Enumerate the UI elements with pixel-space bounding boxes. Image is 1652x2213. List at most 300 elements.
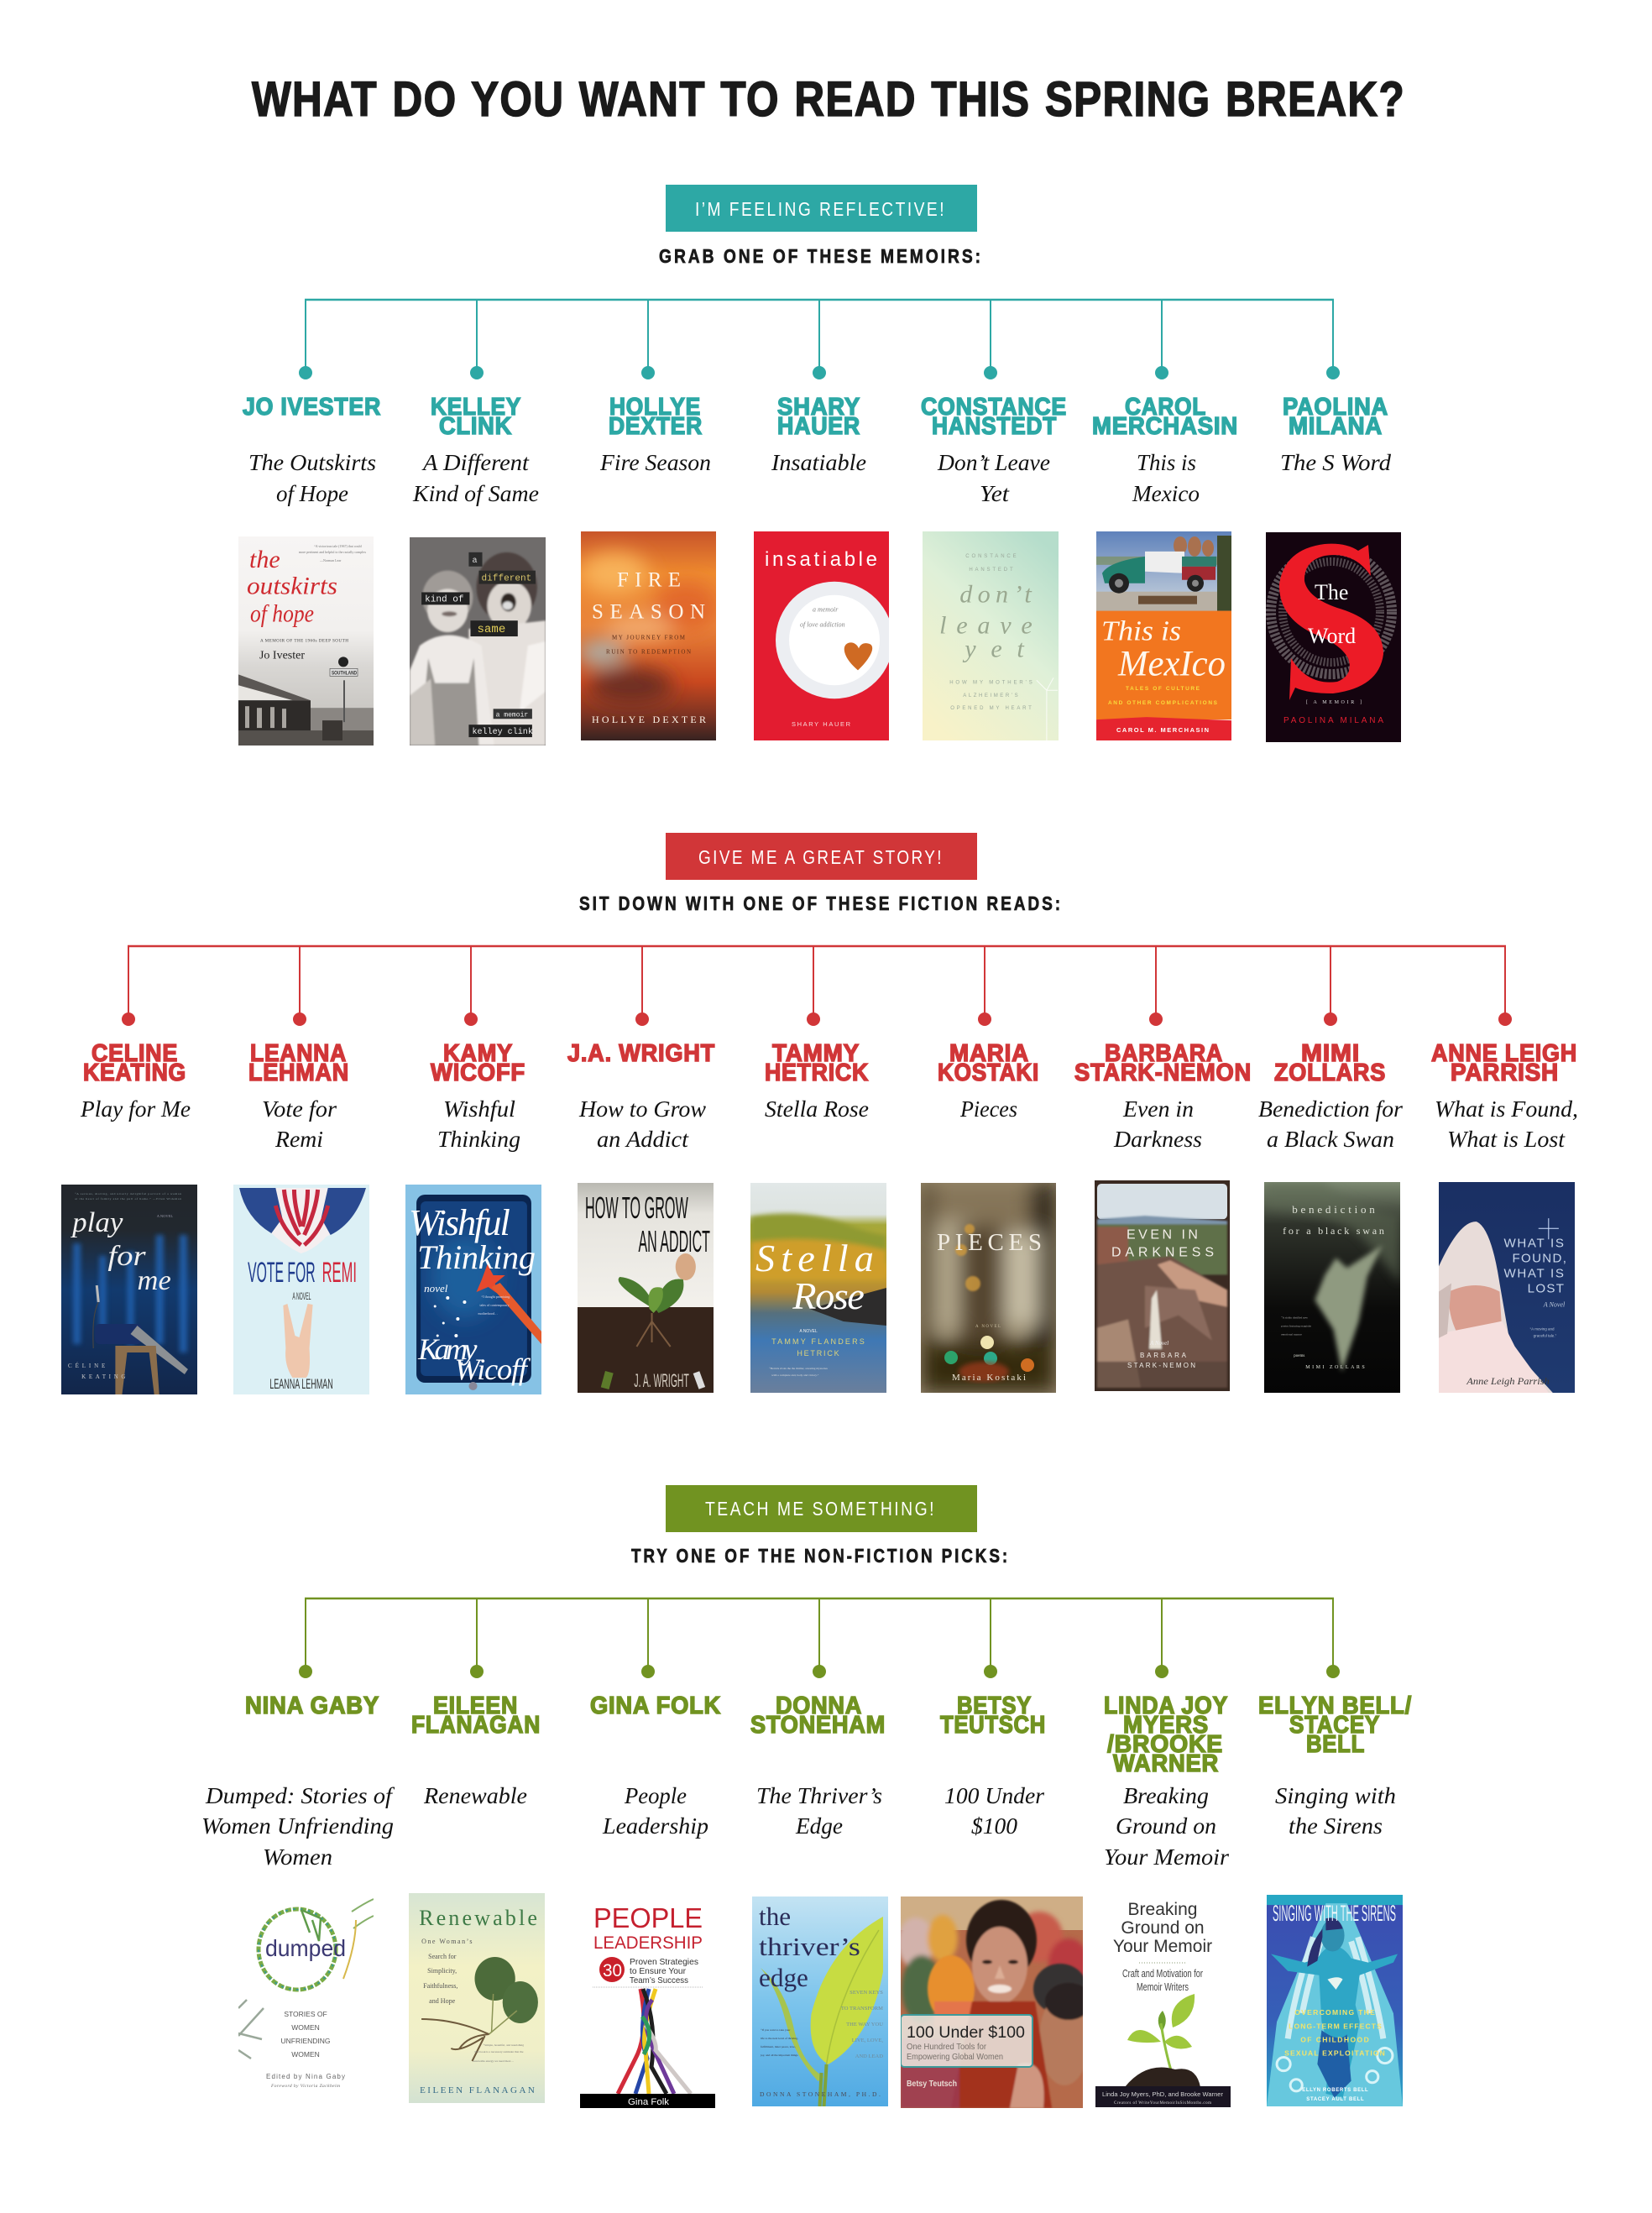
subheading: fiction: SIT DOWN WITH ONE OF THESE FICTION READS: <box>579 892 1063 914</box>
author: Linda Joy Myers / Brooke Warner: LINDA JOY <box>1104 1692 1228 1719</box>
author: Carol Merchasin <box>1092 394 1238 440</box>
book cover: The S Word: [ A MEMOIR ] <box>1306 700 1362 705</box>
book cover: What is Found, What is Lost: WHAT IS <box>1503 1236 1564 1250</box>
book cover: Wishful Thinking: Kamy <box>417 1332 478 1366</box>
book title: Singing with the Sirens: Singing with <box>1275 1782 1396 1808</box>
book title: Vote for Remi: Vote for <box>262 1096 337 1122</box>
book cover: A Different Kind of Same: kelley clink <box>472 727 533 736</box>
book title: 100 Under $100 <box>944 1782 1044 1839</box>
book title: Stella Rose: Stella Rose <box>765 1096 869 1122</box>
author: Maria Kostaki: KOSTAKI <box>938 1059 1039 1086</box>
book cover: Wishful Thinking: Wicoff <box>454 1352 531 1386</box>
book cover: People Leadership: Gina Folk <box>628 2097 670 2107</box>
book cover: Dumped: UNFRIENDING <box>280 2037 331 2045</box>
author: Betsy Teutsch: BETSY <box>957 1692 1032 1719</box>
tree connector: non-fiction <box>299 1598 1340 1678</box>
book cover: Breaking Ground on Your Memoir: Ground on <box>1121 1918 1205 1938</box>
author: Eileen Flanagan: EILEEN <box>433 1692 518 1719</box>
book cover: Don't Leave Yet: HANSTEDT <box>969 568 1013 573</box>
book cover: Don't Leave Yet: ALZHEIMER’S <box>963 693 1018 698</box>
book cover: What is Found, What is Lost: graceful tale.” <box>1534 1334 1557 1338</box>
book cover: Even in Darkness: STARK-NEMON <box>1127 1362 1195 1369</box>
book cover: Fire Season: RUIN TO REDEMPTION <box>606 648 691 655</box>
author: Linda Joy Myers / Brooke Warner: /BROOKE <box>1107 1731 1223 1758</box>
author: Eileen Flanagan: FLANAGAN <box>411 1712 541 1739</box>
book cover: Stella Rose: HETRICK <box>797 1349 839 1358</box>
book cover: The Outskirts of Hope: the <box>249 546 280 573</box>
author: Linda Joy Myers / Brooke Warner <box>1104 1692 1228 1777</box>
book cover: Renewable: Search for <box>428 1953 457 1960</box>
author: Maria Kostaki: MARIA <box>949 1040 1029 1067</box>
book cover: This is Mexico: TALES OF CULTURE <box>1126 686 1200 692</box>
book title: Singing with the Sirens: the Sirens <box>1289 1813 1383 1839</box>
book title: Don't Leave Yet: Yet <box>980 480 1010 506</box>
book title: How to Grow an Addict <box>578 1096 707 1152</box>
book cover: Play for Me: at the heart of family and the pull of home.” —Ellen Wideman <box>75 1197 181 1201</box>
book cover: Insatiable: insatiable <box>765 548 877 571</box>
author: Mimi Zollars <box>1274 1040 1386 1086</box>
author: Donna Stoneham: STONEHAM <box>750 1712 886 1739</box>
book title: The Thriver's Edge: Edge <box>795 1813 843 1839</box>
book cover: The Thriver's Edge: DONNA STONEHAM, PH.D. <box>760 2090 881 2098</box>
author: Kamy Wicoff: KAMY <box>443 1040 513 1067</box>
book cover: Pieces: Maria Kostaki <box>952 1373 1026 1383</box>
book cover: Dumped: STORIES OF <box>284 2010 327 2018</box>
book title: The Outskirts of Hope: of Hope <box>276 480 348 506</box>
book cover: Renewable <box>409 1893 545 2103</box>
book title: Don't Leave Yet <box>937 449 1050 506</box>
book title: What is Found, What is Lost: What is Found, <box>1435 1096 1578 1122</box>
book cover: Breaking Ground on Your Memoir: Creators of WriteYourMemoirInSixMonths.com <box>1114 2101 1211 2106</box>
author: Anne Leigh Parrish <box>1431 1040 1577 1086</box>
author: Tammy Hetrick: TAMMY <box>772 1040 860 1067</box>
book cover: Stella Rose: A NOVEL <box>799 1329 818 1334</box>
book cover: Benediction for a Black Swan: “A richly distilled new <box>1281 1316 1308 1320</box>
author: Leanna Lehman <box>248 1040 349 1086</box>
book cover: The Outskirts of Hope: SOUTHLAND <box>332 671 358 676</box>
author: Paolina Milana: MILANA <box>1289 413 1383 440</box>
book cover: A Different Kind of Same: a <box>472 556 478 565</box>
book cover: Even in Darkness: DARKNESS <box>1111 1244 1214 1259</box>
author: Constance Hanstedt: HANSTEDT <box>932 413 1057 440</box>
author: Leanna Lehman: LEHMAN <box>248 1059 349 1086</box>
book cover: The Thriver's Edge: fulfillment, inner peace, love, <box>761 2045 796 2049</box>
book cover: Don't Leave Yet: don’t <box>959 581 1032 609</box>
book title: How to Grow an Addict: an Addict <box>597 1126 689 1152</box>
book cover: Singing with the Sirens: STACEY AULT BELL <box>1306 2097 1364 2102</box>
section: fiction <box>61 833 1578 1394</box>
book cover: Dumped: WOMEN <box>291 2050 320 2059</box>
author: Barbara Stark-Nemon: STARK-NEMON <box>1074 1059 1252 1086</box>
author: Ellyn Bell / Stacey Bell: STACEY <box>1289 1712 1380 1739</box>
book cover: Benediction for a Black Swan <box>1264 1182 1400 1393</box>
book title: People Leadership: People <box>624 1782 687 1808</box>
book title: Renewable: Renewable <box>423 1782 527 1808</box>
book title: A Different Kind of Same <box>412 449 539 506</box>
author: Eileen Flanagan <box>411 1692 541 1739</box>
author: Tammy Hetrick <box>765 1040 869 1086</box>
book title: Pieces: Pieces <box>959 1096 1017 1122</box>
book title: What is Found, What is Lost <box>1435 1096 1578 1152</box>
book cover: Breaking Ground on Your Memoir <box>1095 1900 1231 2107</box>
book cover: The Thriver's Edge: thriver’s <box>759 1932 860 1961</box>
author: Constance Hanstedt <box>921 394 1067 440</box>
book cover: This is Mexico: This is <box>1101 616 1181 646</box>
author: J.A. Wright: J.A. WRIGHT <box>567 1040 715 1067</box>
book cover: People Leadership: LEADERSHIP <box>593 1933 703 1953</box>
banner: great story <box>666 833 977 880</box>
book cover: This is Mexico <box>1096 531 1231 740</box>
book cover: Dumped <box>238 1898 374 2089</box>
book cover: Fire Season <box>581 531 716 740</box>
author: Kelley Clink: CLINK <box>439 413 512 440</box>
title: WHAT DO YOU WANT TO READ THIS SPRING BREAK? <box>252 72 1405 127</box>
book cover: Singing with the Sirens: LONG-TERM EFFECTS <box>1289 2022 1382 2030</box>
book cover: Breaking Ground on Your Memoir: Your Memoir <box>1113 1937 1212 1956</box>
book cover: The Thriver's Edge: LIVE, LOVE, <box>852 2038 883 2043</box>
book cover: Stella Rose: “Hetrick rivals the the thriller, arresting mysteries <box>769 1366 829 1371</box>
book cover: Renewable: One Woman’s <box>421 1938 472 1945</box>
book cover: Benediction for a Black Swan: poetry featuring exquisite <box>1281 1325 1312 1328</box>
book cover: Benediction for a Black Swan: MIMI ZOLLARS <box>1305 1365 1365 1370</box>
book title: Dumped: Dumped: Stories of <box>205 1782 395 1808</box>
author: Kelley Clink <box>431 394 521 440</box>
book cover: The Outskirts of Hope: more pertinent and helpful to the racially complex <box>299 550 366 554</box>
author: Celine Keating <box>83 1040 186 1086</box>
book title: Singing with the Sirens <box>1275 1782 1396 1839</box>
author: Anne Leigh Parrish: PARRISH <box>1451 1059 1559 1086</box>
book cover: 100 Under $100: One Hundred Tools for <box>907 2042 986 2052</box>
book cover: Vote for Remi: A NOVEL <box>292 1290 311 1302</box>
author: Celine Keating: CELINE <box>91 1040 178 1067</box>
book cover: The S Word: Word <box>1308 624 1356 648</box>
book cover: The Thriver's Edge: TO TRANSFORM <box>841 2006 883 2012</box>
book cover: People Leadership: to Ensure Your <box>630 1966 686 1976</box>
author: Betsy Teutsch <box>940 1692 1046 1739</box>
banner: great story: GIVE ME A GREAT STORY! <box>698 846 944 868</box>
book cover: Don't Leave Yet: leave <box>939 612 1032 639</box>
book cover: Insatiable <box>754 531 889 740</box>
author: Ellyn Bell / Stacey Bell: BELL <box>1306 1731 1365 1758</box>
book title: Vote for Remi <box>262 1096 337 1152</box>
author: Celine Keating: KEATING <box>83 1059 186 1086</box>
book cover: The Thriver's Edge: AND LEAD <box>855 2053 883 2059</box>
book cover: 100 Under $100: Betsy Teutsch <box>907 2080 957 2089</box>
book cover: Stella Rose: with a complete and, body and victory.” <box>771 1373 819 1378</box>
author: Donna Stoneham <box>750 1692 886 1739</box>
book title: The S Word: The S Word <box>1280 449 1391 475</box>
book cover: A Different Kind of Same: a memoir <box>496 711 528 719</box>
book title: Benediction for a Black Swan: a Black Swan <box>1267 1126 1394 1152</box>
book cover: The Thriver's Edge: life to the next level of thriving, <box>761 2037 798 2041</box>
book cover: The Thriver's Edge <box>752 1896 888 2106</box>
author: Shary Hauer <box>777 394 860 440</box>
book cover: Vote for Remi <box>233 1185 369 1394</box>
book cover: Stella Rose: TAMMY FLANDERS <box>771 1337 865 1346</box>
book cover: The Thriver's Edge: the <box>759 1902 791 1931</box>
author: Hollye Dexter: DEXTER <box>609 413 703 440</box>
book cover: Dumped: Edited by Nina Gaby <box>266 2073 345 2080</box>
book cover: A Different Kind of Same <box>410 537 546 746</box>
book cover: Even in Darkness: BARBARA <box>1140 1352 1187 1359</box>
book cover: Insatiable: a memoir <box>813 606 839 614</box>
book cover: The Thriver's Edge: SEVEN KEYS <box>850 1990 883 1996</box>
author: Ellyn Bell / Stacey Bell: ELLYN BELL/ <box>1258 1692 1412 1719</box>
book cover: A Different Kind of Same: same <box>477 623 505 636</box>
author: Constance Hanstedt: CONSTANCE <box>921 394 1067 421</box>
book cover: Pieces <box>921 1183 1056 1393</box>
book title: Don't Leave Yet: Don’t Leave <box>937 449 1050 475</box>
book cover: A Different Kind of Same: different <box>482 574 531 584</box>
book cover: Renewable: this book is a necessary reminder that the <box>474 2050 524 2053</box>
book cover: Singing with the Sirens: ELLYN ROBERTS BELL <box>1302 2088 1368 2093</box>
book cover: The S Word <box>1266 532 1401 742</box>
author: Anne Leigh Parrish: ANNE LEIGH <box>1431 1040 1577 1067</box>
book cover: What is Found, What is Lost: WHAT IS <box>1503 1266 1564 1280</box>
author: Mimi Zollars: MIMI <box>1301 1040 1360 1067</box>
book cover: People Leadership: Proven Strategies <box>630 1957 698 1967</box>
book cover: Renewable: renewable energy we need most… <box>473 2059 514 2063</box>
book title: This is Mexico: Mexico <box>1132 480 1200 506</box>
book title: Even in Darkness <box>1113 1096 1202 1152</box>
book cover: Wishful Thinking: “I thought promising <box>482 1295 510 1299</box>
book cover: This is Mexico: MexIco <box>1117 643 1226 683</box>
book cover: Benediction for a Black Swan: poems <box>1294 1354 1304 1358</box>
book cover: Renewable: EILEEN FLANAGAN <box>420 2085 535 2095</box>
author: Betsy Teutsch: TEUTSCH <box>940 1712 1046 1739</box>
book title: What is Found, What is Lost: What is Lost <box>1447 1126 1566 1152</box>
book cover: The Outskirts of Hope: Jo Ivester <box>259 649 305 662</box>
book cover: Don't Leave Yet <box>923 531 1059 740</box>
author: Hollye Dexter: HOLLYE <box>609 394 701 421</box>
book cover: Insatiable: of love addiction <box>800 621 845 629</box>
book cover: Play for Me: play <box>71 1207 123 1238</box>
book cover: Don't Leave Yet: HOW MY MOTHER’S <box>949 680 1032 685</box>
book cover: Wishful Thinking: Thinking <box>417 1238 536 1276</box>
book cover: The Outskirts of Hope: outskirts <box>247 573 337 600</box>
author: Maria Kostaki <box>938 1040 1039 1086</box>
book title: 100 Under $100: 100 Under <box>944 1782 1044 1808</box>
book cover: The Outskirts of Hope: of hope <box>250 600 314 628</box>
author: Barbara Stark-Nemon <box>1074 1040 1252 1086</box>
book title: This is Mexico <box>1132 449 1200 506</box>
book cover: Fire Season: SEASON <box>592 601 705 624</box>
author: Carol Merchasin: CAROL <box>1125 394 1206 421</box>
section: non-fiction <box>201 1485 1412 2108</box>
author: Mimi Zollars: ZOLLARS <box>1274 1059 1386 1086</box>
book title: Wishful Thinking: Thinking <box>437 1126 520 1152</box>
book title: How to Grow an Addict: How to Grow <box>578 1096 707 1122</box>
book cover: People Leadership: 30 <box>603 1961 622 1980</box>
book cover: 100 Under $100 <box>901 1896 1083 2108</box>
book cover: Benediction for a Black Swan: benediction <box>1292 1203 1375 1216</box>
book cover: Breaking Ground on Your Memoir: Linda Joy Myers, PhD, and Brooke Warner <box>1102 2090 1224 2098</box>
author: Tammy Hetrick: HETRICK <box>765 1059 869 1086</box>
book cover: People Leadership <box>580 1902 715 2108</box>
book cover: Singing with the Sirens: SEXUAL EXPLOITATION <box>1284 2049 1385 2058</box>
author: Kelley Clink: KELLEY <box>431 394 521 421</box>
book title: A Different Kind of Same: Kind of Same <box>412 480 539 506</box>
book title: Wishful Thinking: Wishful <box>443 1096 515 1122</box>
book title: The Outskirts of Hope <box>248 449 376 506</box>
book cover: Wishful Thinking: tales of contemporary <box>480 1303 510 1307</box>
book title: Breaking Ground on Your Memoir: Your Memoir <box>1104 1844 1229 1870</box>
book title: The Outskirts of Hope: The Outskirts <box>248 449 376 475</box>
book cover: A Different Kind of Same: kind of <box>425 594 464 604</box>
book title: Benediction for a Black Swan <box>1258 1096 1403 1152</box>
book title: Vote for Remi: Remi <box>274 1126 323 1152</box>
book cover: Dumped: WOMEN <box>291 2023 320 2032</box>
book cover: Pieces: PIECES <box>937 1229 1042 1256</box>
book title: The Thriver's Edge: The Thriver’s <box>756 1782 882 1808</box>
book title: The Thriver's Edge <box>756 1782 882 1839</box>
author: Kamy Wicoff: WICOFF <box>431 1059 525 1086</box>
book cover: Pieces: A NOVEL <box>975 1325 1001 1329</box>
book cover: How to Grow an Addict <box>578 1183 714 1393</box>
book title: Benediction for a Black Swan: Benediction for <box>1258 1096 1403 1122</box>
book title: Dumped: Women Unfriending <box>201 1813 394 1839</box>
author: Gina Folk: GINA FOLK <box>590 1692 721 1719</box>
book cover: Fire Season: MY JOURNEY FROM <box>612 634 685 641</box>
banner: teach me <box>666 1485 977 1532</box>
book cover: Play for Me: “A serious, moving, and utterly delightful portrait of a woman <box>75 1191 181 1196</box>
book cover: Renewable: “Simple, beautiful, and nourishing <box>484 2043 524 2048</box>
book cover: What is Found, What is Lost: LOST <box>1528 1282 1564 1296</box>
book cover: Play for Me: for <box>107 1241 146 1272</box>
book cover: Don't Leave Yet: yet <box>962 636 1024 662</box>
book cover: Renewable: Renewable <box>419 1906 537 1930</box>
author: Donna Stoneham: DONNA <box>776 1692 862 1719</box>
book cover: What is Found, What is Lost: A Novel <box>1543 1301 1566 1309</box>
author: Paolina Milana <box>1283 394 1388 440</box>
book cover: Don't Leave Yet: CONSTANCE <box>965 554 1017 559</box>
book cover: People Leadership: PEOPLE <box>593 1902 703 1933</box>
author: Kamy Wicoff <box>431 1040 525 1086</box>
book title: Dumped <box>201 1782 395 1870</box>
book cover: The S Word: PAOLINA MILANA <box>1283 716 1383 725</box>
book cover: 100 Under $100: Empowering Global Women <box>907 2052 1003 2062</box>
subheading: non-fiction: TRY ONE OF THE NON-FICTION PICKS: <box>631 1545 1010 1567</box>
book cover: People Leadership: Team’s Success <box>630 1975 688 1985</box>
book title: Dumped: Women <box>263 1844 332 1870</box>
book cover: Play for Me: KEATING <box>81 1373 125 1380</box>
author: Barbara Stark-Nemon: BARBARA <box>1105 1040 1223 1067</box>
book cover: Renewable: Faithfulness, <box>423 1982 457 1990</box>
author: Carol Merchasin: MERCHASIN <box>1092 413 1238 440</box>
book title: Insatiable: Insatiable <box>771 449 866 475</box>
book cover: Dumped: dumped <box>265 1935 346 1961</box>
author: Nina Gaby: NINA GABY <box>245 1692 379 1719</box>
book cover: Even in Darkness: A Novel <box>1149 1340 1168 1347</box>
book title: Even in Darkness: Even in <box>1122 1096 1194 1122</box>
book cover: The Outskirts of Hope: A MEMOIR OF THE 1960s DEEP SOUTH <box>260 639 348 643</box>
book cover: Even in Darkness: EVEN IN <box>1127 1227 1198 1242</box>
book title: People Leadership <box>602 1782 708 1839</box>
book cover: What is Found, What is Lost: “A moving and <box>1530 1327 1555 1331</box>
book cover: The Outskirts of Hope: “A victorious tale (1967) that could <box>314 544 362 548</box>
book cover: Breaking Ground on Your Memoir: Breaking <box>1128 1900 1197 1919</box>
author: Paolina Milana: PAOLINA <box>1283 394 1388 421</box>
book cover: The Thriver's Edge: “If you want to take your <box>761 2027 791 2032</box>
author: Shary Hauer: SHARY <box>777 394 860 421</box>
author: Jo Ivester: JO IVESTER <box>243 394 381 421</box>
author: Ellyn Bell / Stacey Bell <box>1258 1692 1412 1758</box>
book title: 100 Under $100: $100 <box>971 1813 1017 1839</box>
banner: feeling reflective: I’M FEELING REFLECTIVE! <box>695 198 946 220</box>
book title: Breaking Ground on Your Memoir <box>1104 1782 1229 1870</box>
book cover: Singing with the Sirens: OF CHILDHOOD <box>1300 2035 1369 2043</box>
book title: Breaking Ground on Your Memoir: Ground on <box>1116 1813 1216 1839</box>
book cover: Play for Me: me <box>138 1265 171 1296</box>
author: Hollye Dexter <box>609 394 703 440</box>
book cover: Fire Season: HOLLYE DEXTER <box>592 714 706 725</box>
book title: Fire Season: Fire Season <box>599 449 711 475</box>
book cover: This is Mexico: AND OTHER COMPLICATIONS <box>1108 700 1218 706</box>
book cover: Wishful Thinking: motherhood… <box>478 1311 498 1316</box>
book cover: The Thriver's Edge: edge <box>759 1963 808 1992</box>
author: Linda Joy Myers / Brooke Warner: WARNER <box>1113 1750 1219 1777</box>
book title: A Different Kind of Same: A Different <box>421 449 530 475</box>
book title: This is Mexico: This is <box>1137 449 1196 475</box>
banner: teach me: TEACH ME SOMETHING! <box>705 1498 936 1520</box>
book cover: 100 Under $100: 100 Under $100 <box>907 2024 1025 2042</box>
book title: Wishful Thinking <box>437 1096 520 1152</box>
book cover: Play for Me: A NOVEL <box>157 1214 173 1218</box>
book title: Even in Darkness: Darkness <box>1113 1126 1202 1152</box>
book cover: Breaking Ground on Your Memoir: Memoir Writers <box>1137 1980 1189 1993</box>
tree connector: memoirs <box>299 300 1340 379</box>
book cover: Singing with the Sirens <box>1267 1895 1403 2106</box>
book cover: The S Word: The <box>1315 580 1348 604</box>
author: Shary Hauer: HAUER <box>777 413 860 440</box>
book cover: Fire Season: FIRE <box>617 569 681 592</box>
book cover: This is Mexico: CAROL M. MERCHASIN <box>1116 726 1209 734</box>
author: Linda Joy Myers / Brooke Warner: MYERS <box>1123 1712 1209 1739</box>
book cover: What is Found, What is Lost: FOUND, <box>1513 1251 1566 1265</box>
book title: Breaking Ground on Your Memoir: Breaking <box>1123 1782 1209 1808</box>
book cover: The Thriver's Edge: THE WAY YOU <box>846 2022 883 2027</box>
book cover: Wishful Thinking <box>405 1185 541 1394</box>
book cover: Don't Leave Yet: OPENED MY HEART <box>950 706 1032 711</box>
book title: People Leadership: Leadership <box>602 1813 708 1839</box>
book cover: Benediction for a Black Swan: for a black swan <box>1283 1225 1384 1237</box>
book title: Play for Me: Play for Me <box>80 1096 191 1122</box>
book cover: Even in Darkness <box>1095 1180 1230 1391</box>
book cover: Renewable: and Hope <box>429 1997 456 2005</box>
book cover: The Outskirts of Hope: —Norman Lear <box>319 558 342 562</box>
book cover: Wishful Thinking: Wishful <box>409 1202 510 1243</box>
book cover: Singing with the Sirens: OVERCOMING THE <box>1294 2008 1375 2017</box>
book cover: Stella Rose: Stella <box>755 1237 874 1279</box>
book cover: The Thriver's Edge: joy, and all the important things <box>760 2053 798 2058</box>
book cover: Insatiable: SHARY HAUER <box>792 720 851 728</box>
book cover: Benediction for a Black Swan: emotional nuance <box>1281 1333 1302 1337</box>
tree connector: fiction <box>122 946 1512 1026</box>
book cover: What is Found, What is Lost <box>1439 1182 1575 1393</box>
book cover: Stella Rose <box>750 1183 886 1393</box>
book cover: Renewable: Simplicity, <box>427 1967 457 1975</box>
book cover: Stella Rose: Rose <box>792 1274 865 1317</box>
book cover: Play for Me <box>61 1185 197 1394</box>
book cover: What is Found, What is Lost: Anne Leigh Parrish <box>1466 1375 1550 1387</box>
book cover: Wishful Thinking: novel <box>424 1282 448 1295</box>
author: Leanna Lehman: LEANNA <box>250 1040 347 1067</box>
book cover: Play for Me: CÉLINE <box>68 1363 105 1369</box>
book cover: The Outskirts of Hope <box>238 536 374 746</box>
section: memoirs <box>238 185 1401 746</box>
book cover: Dumped: Foreword by Victoria Zackheim <box>270 2084 340 2089</box>
banner: feeling reflective <box>666 185 977 232</box>
